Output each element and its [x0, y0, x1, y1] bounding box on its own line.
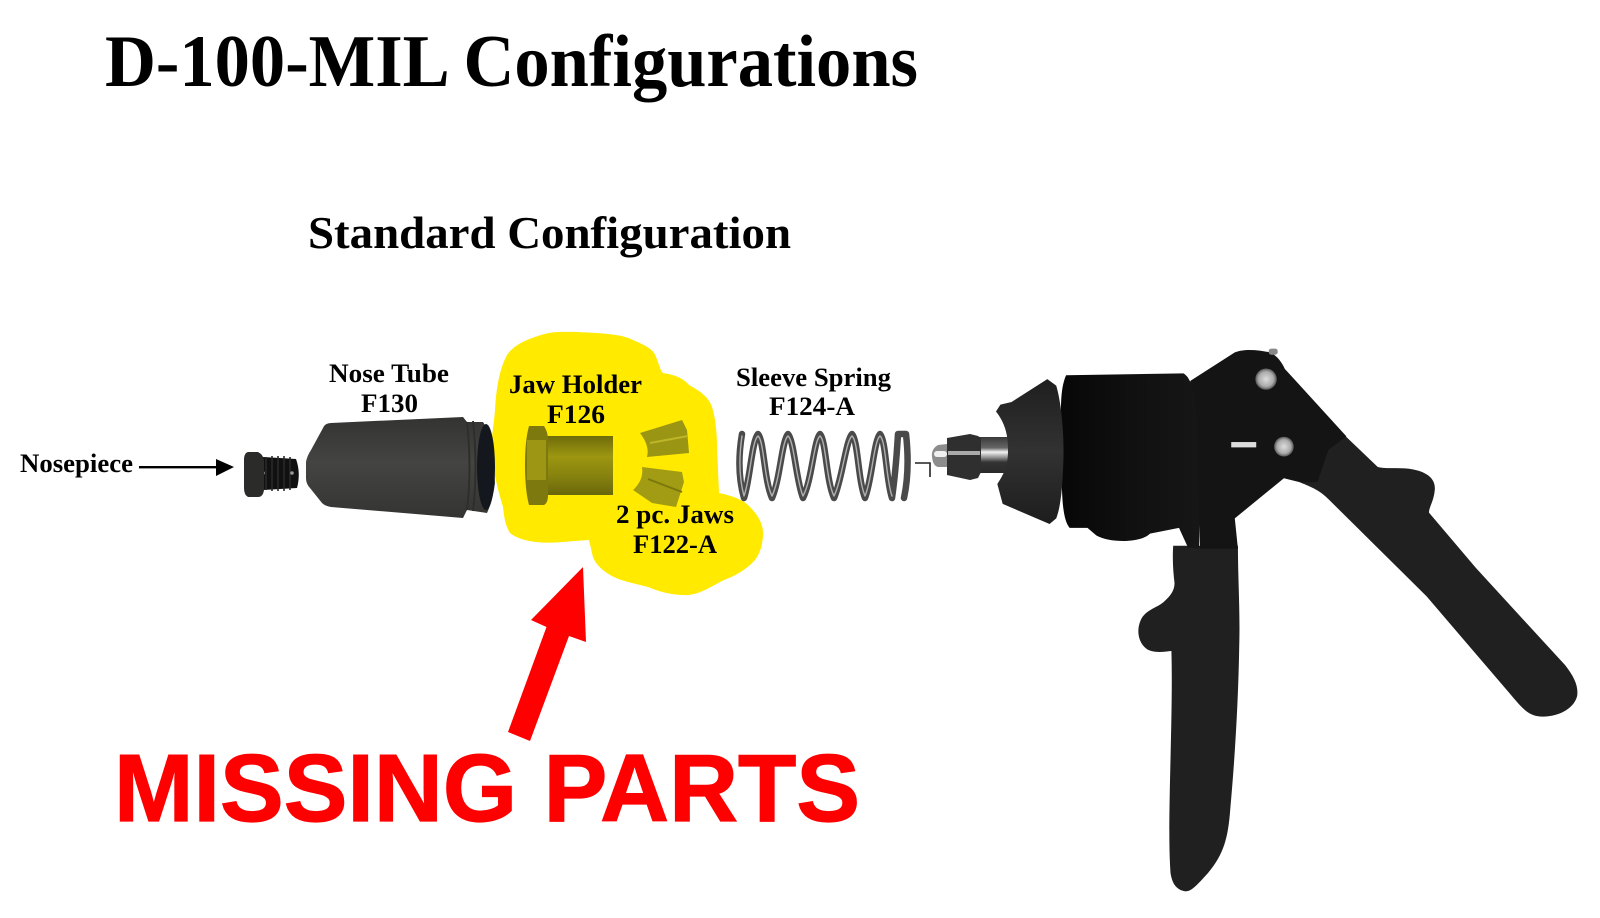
- part: nose tube: [306, 417, 495, 518]
- top pin: [1269, 349, 1278, 355]
- leader mark: [915, 463, 930, 477]
- nosepiece label: Nosepiece: [20, 449, 133, 478]
- sleeve spring label: Sleeve Spring: [736, 363, 891, 392]
- sleeve spring label: [736, 363, 891, 421]
- heading: standard configuration: Standard Configuration: [308, 208, 791, 258]
- lever plate: [1190, 350, 1346, 549]
- callout: missing parts: MISSING PARTS: [114, 735, 860, 842]
- nose tube label: Nose Tube: [329, 359, 449, 388]
- part: nosepiece: [244, 452, 299, 497]
- jaws label: 2 pc. Jaws: [616, 500, 734, 529]
- arrow: red pointer to missing parts: [508, 567, 586, 741]
- jaw holder label: F126: [547, 400, 605, 429]
- sleeve spring label: F124-A: [769, 392, 855, 421]
- cylinder body: [1061, 373, 1199, 549]
- lever handle: [1300, 431, 1577, 717]
- jaw holder label: Jaw Holder: [509, 370, 642, 399]
- nose cone: [996, 379, 1064, 524]
- part: jaw holder: [525, 426, 613, 505]
- jaws label: F122-A: [633, 530, 717, 559]
- bolt: lower: [1274, 437, 1294, 457]
- yellow highlight behind missing parts: [492, 332, 763, 595]
- part: two piece jaws: [633, 420, 689, 507]
- part: chuck: [932, 434, 1015, 480]
- nose tube label: [329, 359, 449, 418]
- part: sleeve spring: [739, 434, 908, 498]
- nose tube label: F130: [361, 389, 418, 418]
- jaw holder label: [509, 370, 642, 429]
- grip handle: [1138, 546, 1239, 891]
- bolt: upper: [1255, 368, 1277, 390]
- slot: [1231, 442, 1256, 447]
- jaws label: [616, 500, 734, 559]
- arrow: points to nosepiece: [139, 459, 234, 476]
- riveter tool: [996, 349, 1577, 891]
- title: D-100-MIL Configurations: [105, 21, 918, 103]
